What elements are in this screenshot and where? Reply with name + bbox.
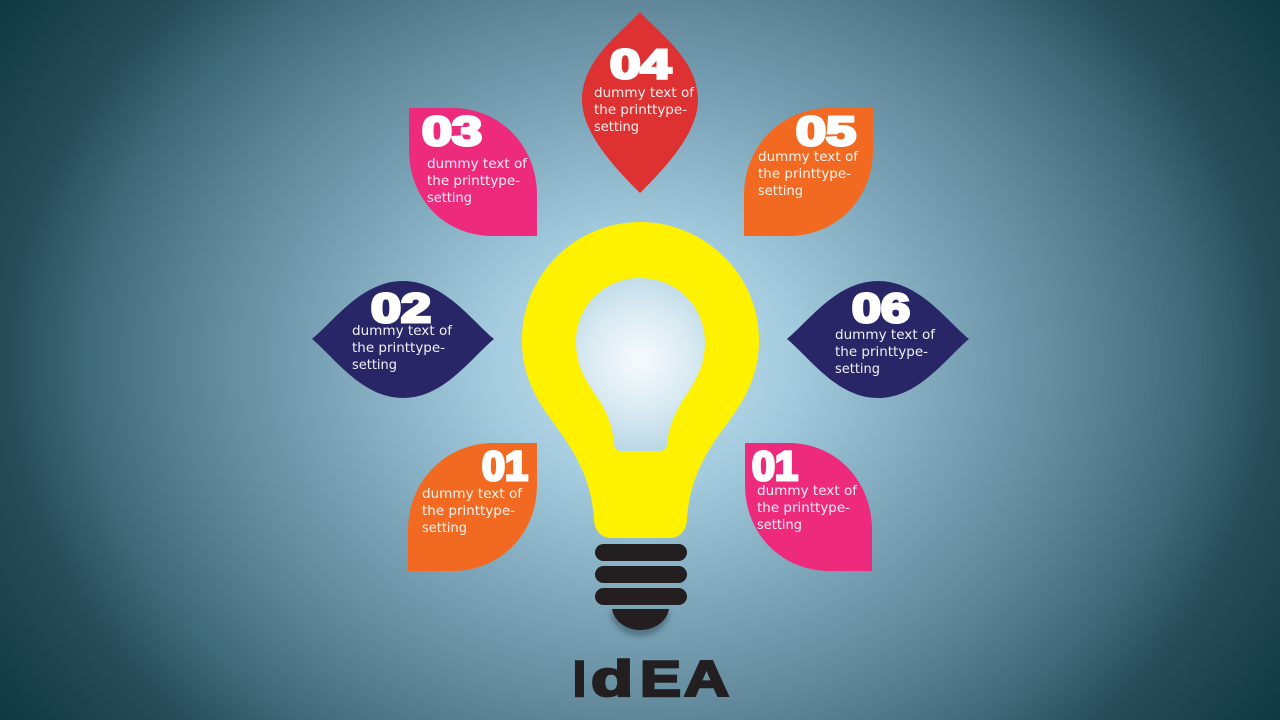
petal 06 (787, 281, 969, 398)
base cap (612, 609, 669, 630)
text 05: setting (758, 183, 803, 199)
text 01 left: setting (422, 520, 467, 536)
title: IDEA: A (684, 651, 729, 707)
text 06: the printtype- (835, 344, 928, 360)
text 03: the printtype- (427, 173, 520, 189)
text 01 left: dummy text of (422, 486, 523, 502)
bulb glass (576, 278, 705, 451)
text 01 left: the printtype- (422, 503, 515, 519)
petal 05: 05 (796, 108, 856, 154)
text 04: dummy text of (594, 85, 695, 101)
petal 02 (312, 281, 494, 398)
text 03: setting (427, 190, 472, 206)
petal 04: 04 (610, 41, 671, 87)
text 06: setting (835, 361, 880, 377)
text 01 right: setting (757, 517, 802, 533)
title: IDEA: E (640, 651, 681, 707)
text 03: dummy text of (427, 156, 528, 172)
petal 03: 03 (422, 108, 482, 154)
bulb screw base (595, 544, 687, 605)
base cap shadow (610, 612, 670, 636)
petal 01 left: 01 (482, 443, 528, 489)
light bulb (522, 222, 759, 636)
text 02: setting (352, 357, 397, 373)
petal 02: 02 (371, 285, 431, 331)
petal 04 (582, 12, 698, 193)
petal 01 right: 01 (752, 443, 798, 489)
text 02: the printtype- (352, 340, 445, 356)
text 05: the printtype- (758, 166, 851, 182)
text 05: dummy text of (758, 149, 859, 165)
text 01 right: the printtype- (757, 500, 850, 516)
text 04: the printtype- (594, 102, 687, 118)
petal 05 (744, 108, 873, 236)
petal 01 right (745, 443, 872, 571)
title: IDEA: I (573, 651, 586, 707)
petal 03 (409, 108, 537, 236)
bulb yellow body (522, 222, 759, 538)
title: IDEA (573, 651, 729, 707)
text 01 right: dummy text of (757, 483, 858, 499)
title: IDEA: d (591, 651, 633, 707)
petal 01 left (408, 443, 537, 571)
text 04: setting (594, 119, 639, 135)
petal 06: 06 (852, 285, 910, 331)
text 02: dummy text of (352, 323, 453, 339)
text 06: dummy text of (835, 327, 936, 343)
